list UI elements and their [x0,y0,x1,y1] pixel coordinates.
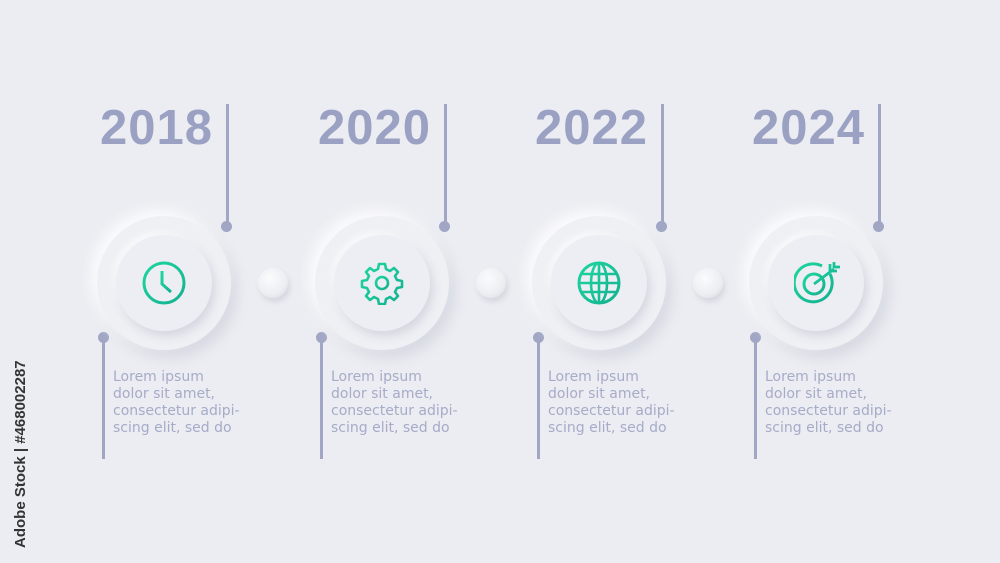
text [113,369,240,436]
text: scing elit, sed do [765,420,884,436]
text [765,369,892,436]
icon: target [749,216,883,350]
text: Lorem ipsum [113,369,204,385]
watermark side text: Adobe Stock | #468002287 [12,360,29,548]
step 2020 [310,101,509,459]
text: consectetur adipi- [113,403,240,419]
text: dolor sit amet, [548,386,650,402]
step 2022 [527,101,726,459]
icon: gear [315,216,449,350]
text: scing elit, sed do [113,420,232,436]
text: consectetur adipi- [331,403,458,419]
year: 2022 [535,101,648,155]
text: Lorem ipsum [765,369,856,385]
text: dolor sit amet, [113,386,215,402]
year: 2024 [752,101,865,155]
step 2024 [744,101,892,459]
text: scing elit, sed do [548,420,667,436]
text [548,369,675,436]
text: Lorem ipsum [331,369,422,385]
text: consectetur adipi- [548,403,675,419]
text: dolor sit amet, [765,386,867,402]
text: Lorem ipsum [548,369,639,385]
icon: globe [532,216,666,350]
icon: clock [97,216,231,350]
text: scing elit, sed do [331,420,450,436]
year: 2020 [318,101,431,155]
text: dolor sit amet, [331,386,433,402]
step 2018 [92,101,291,459]
text: consectetur adipi- [765,403,892,419]
text [331,369,458,436]
year: 2018 [100,101,213,155]
